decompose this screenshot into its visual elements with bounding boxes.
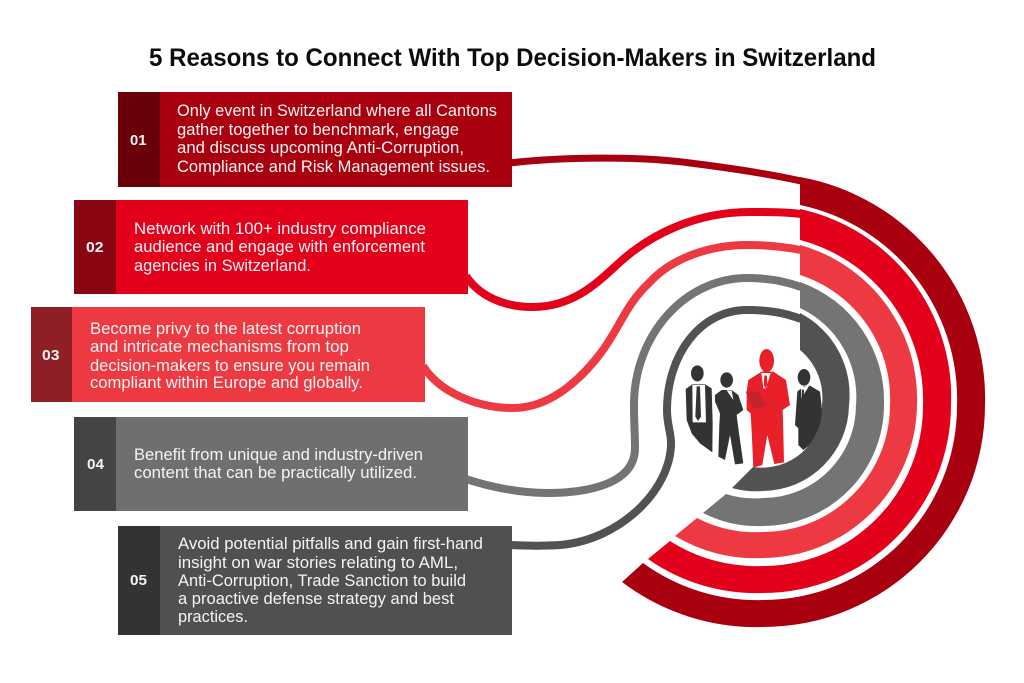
- text block 03: [90, 320, 370, 392]
- person 3: red lead: [746, 349, 790, 468]
- text block 01: Only event in Switzerland where all Cantons: [177, 102, 497, 120]
- arc 03: light red: [423, 245, 917, 558]
- text block 02: agencies in Switzerland.: [134, 257, 311, 275]
- arc 05: dark grey: [510, 310, 850, 546]
- person 2: [715, 372, 743, 464]
- text block 02: audience and engage with enforcement: [134, 238, 425, 256]
- text block 05: [178, 535, 483, 626]
- text block 01: and discuss upcoming Anti-Corruption,: [177, 139, 464, 157]
- arc 02: bright red: [466, 209, 951, 593]
- text block 01: Compliance and Risk Management issues.: [177, 158, 490, 176]
- text block 02: [134, 220, 426, 275]
- number 01: 01: [130, 132, 146, 149]
- text block 02: Network with 100+ industry compliance: [134, 220, 426, 238]
- person 1: [686, 365, 713, 452]
- text block 05: insight on war stories relating to AML,: [178, 554, 458, 572]
- panel 04: [74, 417, 468, 511]
- panel 02: [74, 200, 468, 294]
- text block 04: content that can be practically utilized.: [134, 464, 417, 482]
- panel 01: [118, 92, 512, 187]
- text block 04: [134, 446, 423, 482]
- text block 01: gather together to benchmark, engage: [177, 121, 459, 139]
- panel 03: [31, 307, 425, 402]
- arc 01: dark red: [510, 158, 985, 627]
- number 04: 04: [87, 456, 105, 473]
- text block 03: Become privy to the latest corruption: [90, 320, 361, 338]
- person 4: [795, 369, 823, 450]
- title: 5 Reasons to Connect With Top Decision-Makers in Switzerland: [149, 44, 876, 72]
- text block 05: Avoid potential pitfalls and gain first-hand: [178, 535, 483, 553]
- number 02: 02: [86, 239, 104, 256]
- text block 01: [177, 102, 497, 176]
- panel 05: [118, 526, 512, 635]
- text block 05: practices.: [178, 608, 248, 626]
- text block 05: a proactive defense strategy and best: [178, 590, 454, 608]
- number 03: 03: [42, 347, 60, 364]
- text block 04: Benefit from unique and industry-driven: [134, 446, 423, 464]
- text block 05: Anti-Corruption, Trade Sanction to build: [178, 572, 466, 590]
- text block 03: compliant within Europe and globally.: [90, 374, 363, 392]
- arc 04: grey: [466, 278, 884, 526]
- icon: business people silhouettes: [686, 349, 823, 468]
- text block 03: decision-makers to ensure you remain: [90, 357, 370, 375]
- number 05: 05: [130, 572, 147, 589]
- chart: concentric arcs: [423, 158, 985, 627]
- text block 03: and intricate mechanisms from top: [90, 338, 349, 356]
